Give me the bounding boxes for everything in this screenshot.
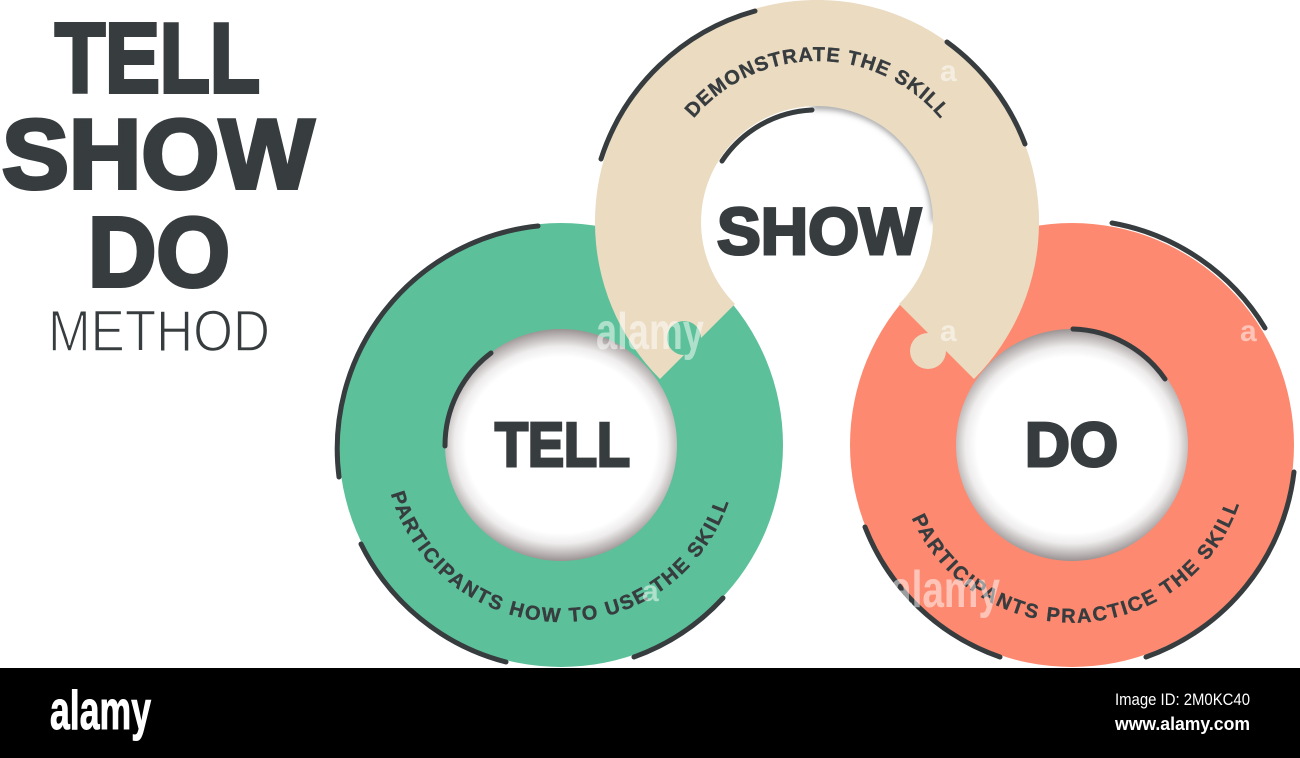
curved text: participants how to use the skill: PARTICIPANTS HOW TO USE THE SKILL [391, 490, 729, 622]
subtitle: method: METHOD [48, 299, 270, 364]
footer url: www.alamy.com [1114, 714, 1250, 734]
dark arcs: do [865, 223, 1294, 657]
dark arcs: tell [337, 226, 723, 662]
puzzle knob: green into show ring [667, 321, 701, 355]
watermarks: alamy [890, 561, 1000, 619]
label: do: DO [1025, 411, 1118, 480]
do hole [956, 329, 1188, 561]
watermarks [596, 55, 1257, 619]
title [2, 3, 315, 307]
watermarks: a [940, 55, 957, 88]
panel: do ring [850, 223, 1294, 667]
label: tell: TELL [495, 411, 630, 480]
panel: tell ring [339, 223, 783, 667]
watermarks: alamy [596, 303, 704, 361]
watermarks: a [1240, 315, 1257, 348]
show inner shadow [812, 106, 935, 222]
title: DO [88, 197, 230, 307]
footer bar [0, 668, 1300, 758]
footer logo: alamy [50, 679, 151, 741]
dark arcs: show [601, 11, 1025, 161]
tell hole [445, 329, 677, 561]
footer image id: Image ID: 2M0KC40 [1115, 690, 1250, 709]
watermarks: a [940, 315, 957, 348]
panel: show ring [595, 0, 1039, 379]
puzzle knob: beige into do ring [910, 333, 946, 369]
watermarks: a [642, 575, 659, 608]
label: show: SHOW [717, 194, 922, 268]
curved text: demonstrate the skill: DEMONSTRATE THE SKILL [684, 47, 946, 118]
title: TELL [55, 3, 260, 113]
curved text: participants practice the skill: PARTICIPANTS PRACTICE THE SKILL [912, 504, 1239, 623]
title: SHOW [2, 99, 315, 209]
